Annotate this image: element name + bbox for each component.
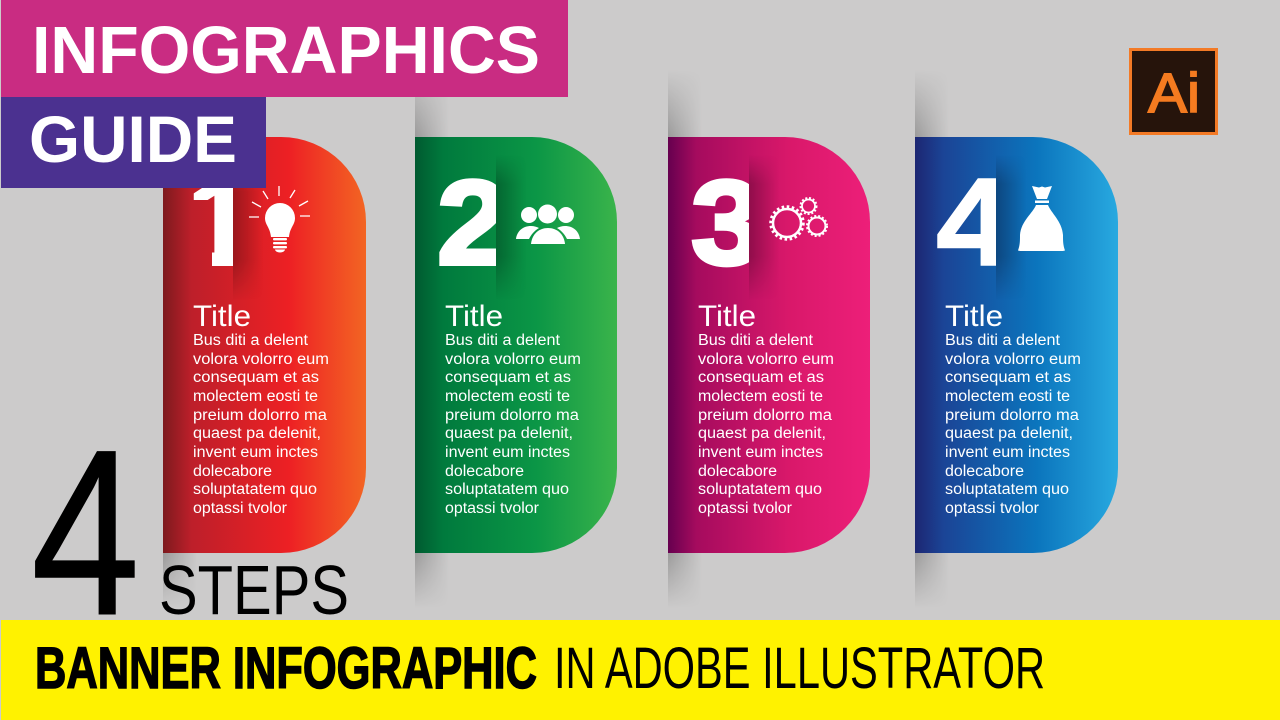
body text 1: preium dolorro ma bbox=[193, 407, 327, 424]
body text 1: invent eum inctes bbox=[193, 444, 318, 461]
numeral 4: 4 bbox=[936, 153, 1013, 292]
banner: yellow footer: IN ADOBE ILLUSTRATOR bbox=[554, 636, 1045, 701]
body text 2: soluptatatem quo bbox=[445, 481, 569, 498]
body text 2: dolecabore bbox=[445, 463, 524, 480]
body text 2: optassi tvolor bbox=[445, 500, 539, 517]
icon: Adobe Illustrator logo bbox=[1130, 50, 1216, 134]
panel background 1 bbox=[163, 137, 366, 553]
panel: step 4 bbox=[915, 137, 1118, 553]
body text 4: preium dolorro ma bbox=[945, 407, 1079, 424]
heading: infographics: INFOGRAPHICS bbox=[32, 13, 540, 88]
banner: yellow footer bbox=[1, 620, 1280, 720]
body text 2 bbox=[445, 332, 581, 517]
icon: Adobe Illustrator logo: Ai bbox=[1148, 61, 1200, 124]
body text 1 bbox=[193, 332, 329, 517]
body text 2: invent eum inctes bbox=[445, 444, 570, 461]
body text 4: molectem eosti te bbox=[945, 388, 1070, 405]
heading: 4 steps: STEPS bbox=[159, 551, 349, 629]
body text 4: invent eum inctes bbox=[945, 444, 1070, 461]
body text 4: consequam et as bbox=[945, 369, 1071, 386]
body text 3: optassi tvolor bbox=[698, 500, 792, 517]
panel background 2 bbox=[415, 137, 617, 553]
body text 4 bbox=[945, 332, 1081, 517]
body text 2: volora volorro eum bbox=[445, 351, 581, 368]
body text 2: quaest pa delenit, bbox=[445, 425, 573, 442]
body text 4: quaest pa delenit, bbox=[945, 425, 1073, 442]
heading: 4 steps bbox=[31, 401, 349, 665]
body text 2: preium dolorro ma bbox=[445, 407, 579, 424]
body text 3: invent eum inctes bbox=[698, 444, 823, 461]
numeral 1: 1 bbox=[186, 154, 256, 293]
numeral 3: 3 bbox=[691, 156, 763, 290]
body text 1: soluptatatem quo bbox=[193, 481, 317, 498]
body text 1: volora volorro eum bbox=[193, 351, 329, 368]
title 2: Title bbox=[445, 300, 503, 333]
body text 1: Bus diti a delent bbox=[193, 332, 309, 349]
body text 1: optassi tvolor bbox=[193, 500, 287, 517]
body text 4: soluptatatem quo bbox=[945, 481, 1069, 498]
body text 3 bbox=[698, 332, 834, 517]
title 4: Title bbox=[945, 300, 1003, 333]
panel: step 2 bbox=[415, 137, 617, 553]
body text 3: volora volorro eum bbox=[698, 351, 834, 368]
body text 3: Bus diti a delent bbox=[698, 332, 814, 349]
heading: guide bbox=[1, 97, 266, 188]
body text 3: quaest pa delenit, bbox=[698, 425, 826, 442]
body text 3: preium dolorro ma bbox=[698, 407, 832, 424]
heading: guide: GUIDE bbox=[29, 102, 237, 176]
body text 1: quaest pa delenit, bbox=[193, 425, 321, 442]
panel: step 1 bbox=[163, 137, 366, 553]
title 1: Title bbox=[193, 300, 251, 333]
body text 4: Bus diti a delent bbox=[945, 332, 1061, 349]
body text 1: dolecabore bbox=[193, 463, 272, 480]
icon: light bulb bbox=[249, 186, 310, 253]
panel: step 3 bbox=[668, 137, 870, 553]
panel background 3 bbox=[668, 137, 870, 553]
icon: group of people bbox=[516, 204, 580, 244]
body text 3: molectem eosti te bbox=[698, 388, 823, 405]
body text 3: soluptatatem quo bbox=[698, 481, 822, 498]
panel background 4 bbox=[915, 137, 1118, 553]
icon: gears bbox=[771, 198, 827, 239]
numeral 2: 2 bbox=[437, 156, 509, 290]
body text 2: Bus diti a delent bbox=[445, 332, 561, 349]
body text 1: molectem eosti te bbox=[193, 388, 318, 405]
banner: yellow footer: BANNER INFOGRAPHIC bbox=[35, 636, 537, 701]
body text 3: consequam et as bbox=[698, 369, 824, 386]
body text 2: molectem eosti te bbox=[445, 388, 570, 405]
title 3: Title bbox=[698, 300, 756, 333]
body text 1: consequam et as bbox=[193, 369, 319, 386]
body text 3: dolecabore bbox=[698, 463, 777, 480]
icon: money bag bbox=[1018, 186, 1065, 251]
shadows around the panels bbox=[163, 70, 949, 608]
heading: 4 steps: 4 bbox=[31, 401, 140, 665]
body text 2: consequam et as bbox=[445, 369, 571, 386]
body text 4: dolecabore bbox=[945, 463, 1024, 480]
body text 4: optassi tvolor bbox=[945, 500, 1039, 517]
body text 4: volora volorro eum bbox=[945, 351, 1081, 368]
